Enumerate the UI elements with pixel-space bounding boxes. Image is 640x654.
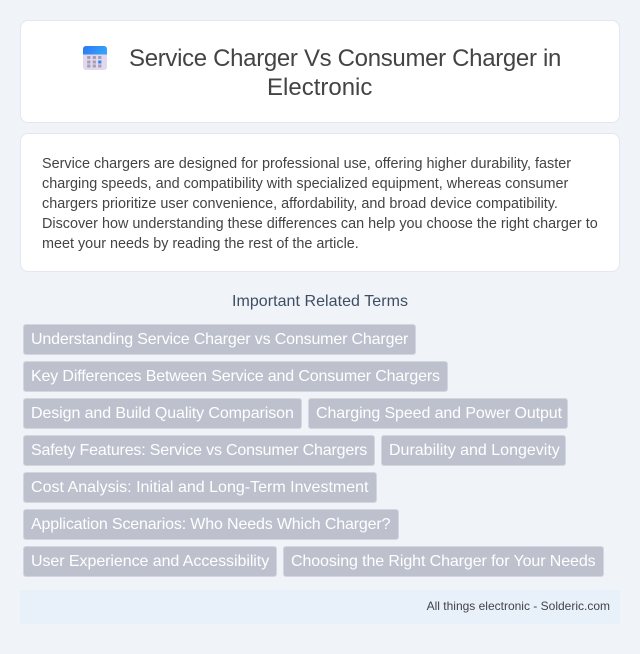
heading: important related terms: Important Related Terms xyxy=(232,293,408,310)
tag: Durability and Longevity xyxy=(389,442,560,459)
tag: Design and Build Quality Comparison xyxy=(31,405,294,422)
tag: User Experience and Accessibility xyxy=(31,553,269,570)
title xyxy=(129,45,561,101)
panel: intro text xyxy=(20,133,620,272)
text block: intro: chargers prioritize user convenience, affordability, and broad device compatibility. xyxy=(42,196,558,212)
tag xyxy=(23,398,302,429)
tag xyxy=(23,509,399,540)
tag: Application Scenarios: Who Needs Which Charger? xyxy=(31,516,390,533)
tag: Choosing the Right Charger for Your Needs xyxy=(291,553,596,570)
title: Service Charger Vs Consumer Charger in xyxy=(129,45,561,72)
tag xyxy=(23,361,448,392)
icon: calendar xyxy=(83,46,107,70)
text block: intro: charging speeds, and compatibility with specialized equipment, whereas consumer xyxy=(42,176,568,192)
tag: Understanding Service Charger vs Consumer Charger xyxy=(31,331,408,348)
tag xyxy=(23,546,277,577)
text block: intro xyxy=(42,156,598,252)
footer xyxy=(20,590,620,624)
tag xyxy=(23,472,377,503)
title: Electronic xyxy=(267,74,372,101)
tag xyxy=(308,398,568,429)
tag: Cost Analysis: Initial and Long-Term Investment xyxy=(31,479,369,496)
text block: intro: Discover how understanding these differences can help you choose the right charger to xyxy=(42,216,598,232)
panel: title card xyxy=(20,20,620,123)
text block: intro: meet your needs by reading the rest of the article. xyxy=(42,236,359,252)
tag: Key Differences Between Service and Consumer Chargers xyxy=(31,368,440,385)
tag xyxy=(23,324,416,355)
tag xyxy=(283,546,604,577)
tag xyxy=(381,435,566,466)
tag list xyxy=(23,324,604,577)
tag: Safety Features: Service vs Consumer Chargers xyxy=(31,442,367,459)
footer credit: All things electronic - Solderic.com xyxy=(427,599,610,613)
tag xyxy=(23,435,375,466)
tag: Charging Speed and Power Output xyxy=(316,405,562,422)
text block: intro: Service chargers are designed for professional use, offering higher durability, faster xyxy=(42,156,571,172)
